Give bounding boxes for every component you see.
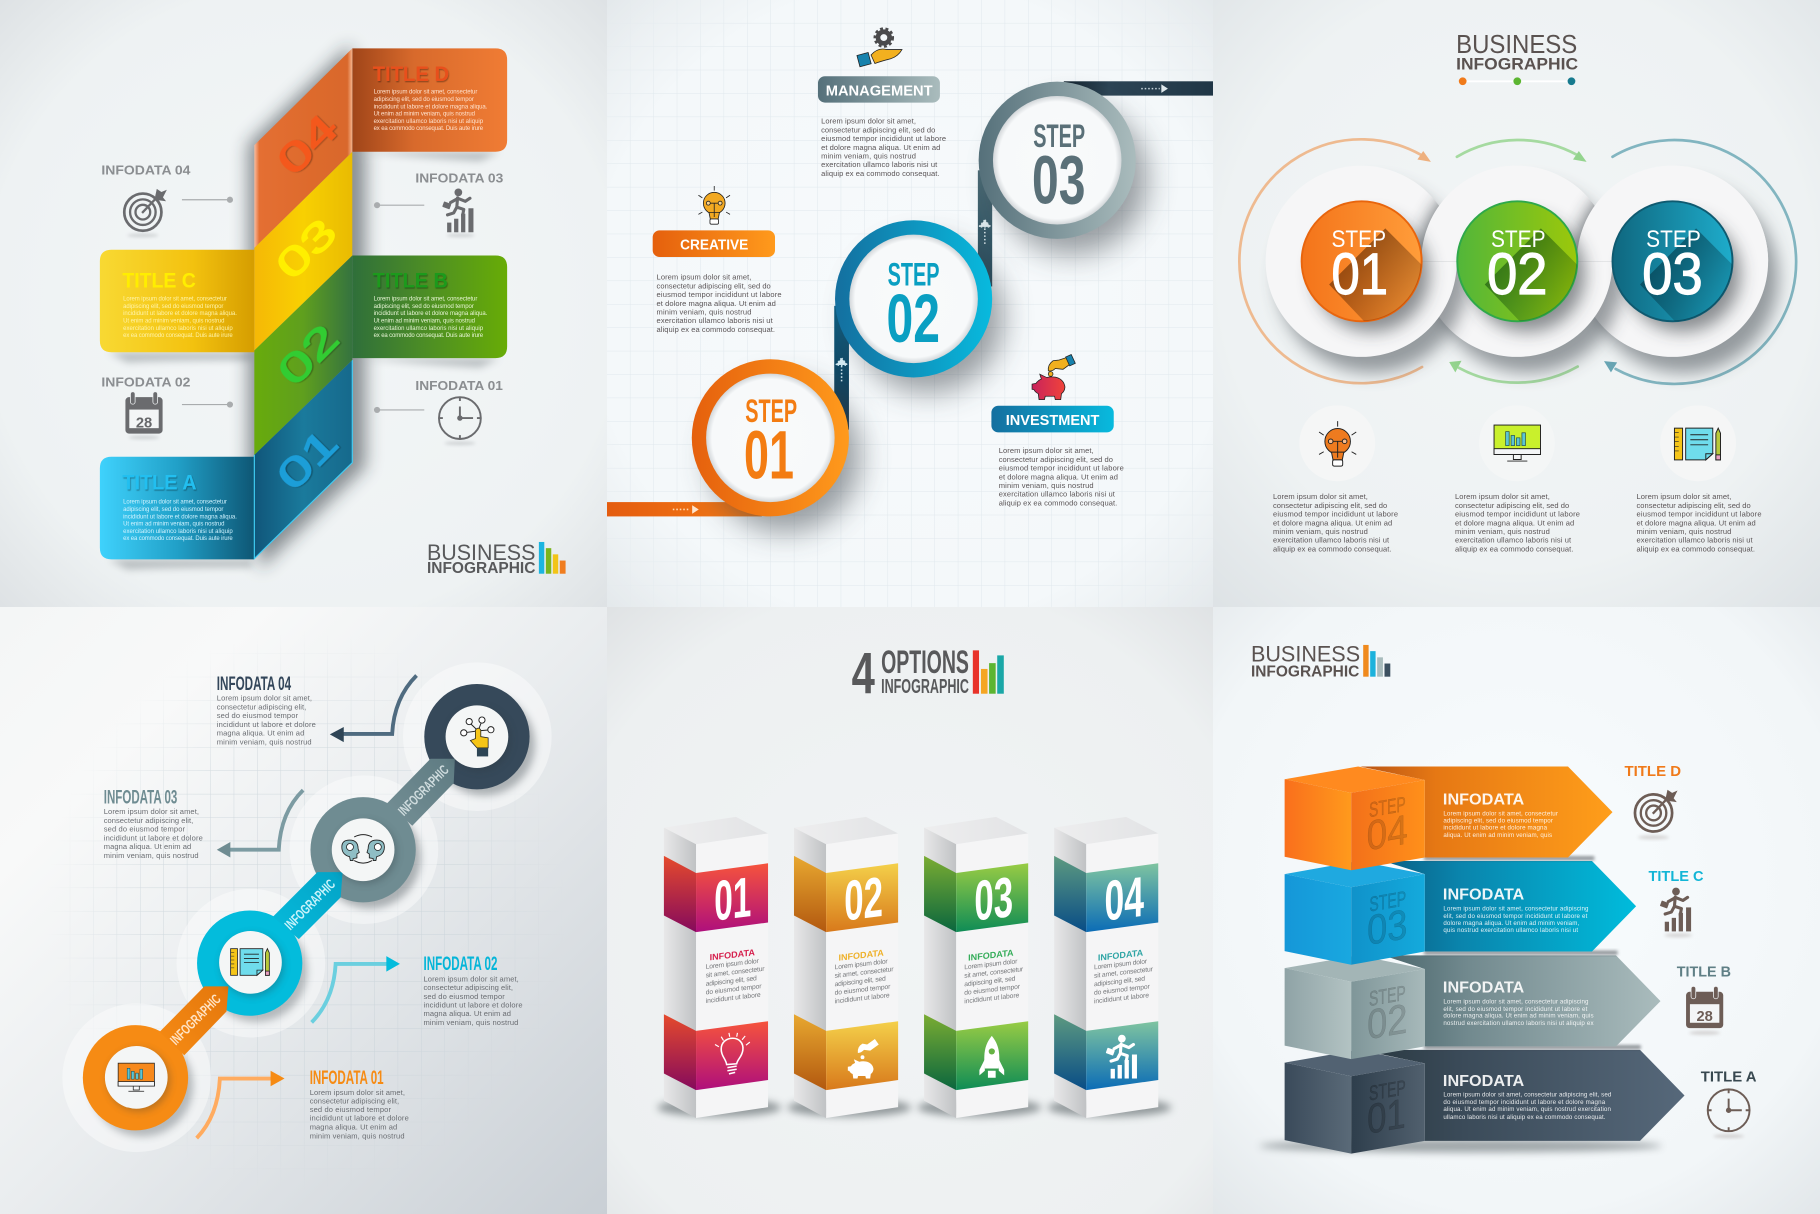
label: investment: INVESTMENT [1006, 413, 1100, 429]
logo: business infographic: INFOGRAPHIC [427, 560, 535, 577]
text block: step 01: eiusmod tempor incididunt ut labore [1273, 509, 1398, 518]
column 02 [787, 817, 911, 1118]
arrow block: step 04: STEP [1369, 793, 1406, 822]
text block: infodata 04: consectetur adipiscing elit, [217, 703, 306, 712]
text block: step 02: aliquip ex ea commodo consequat. [1455, 545, 1573, 554]
arrow block: step 01: 01 [1367, 1089, 1406, 1143]
heading [1456, 31, 1578, 85]
icon: piggy bank [1032, 355, 1075, 400]
infodata labels with icons: INFODATA 04 [101, 163, 191, 178]
label: management [818, 76, 940, 103]
icon: light bulb [698, 186, 730, 224]
ribbon shadow [248, 45, 366, 569]
text block: infodata 01 [310, 1067, 409, 1141]
button: step 02: STEP [1491, 226, 1546, 253]
text block: investment: Lorem ipsum dolor sit amet, [999, 446, 1094, 455]
text block: creative: Lorem ipsum dolor sit amet, [657, 273, 751, 282]
text block: creative [657, 273, 782, 334]
icon: bulb in circle [1299, 405, 1375, 481]
infodata labels with icons: INFODATA 03 [415, 171, 503, 186]
column 03: do eiusmod tempor [964, 983, 1021, 997]
title C with runner icon: TITLE C [1649, 869, 1704, 885]
text block: investment: eiusmod tempor incididunt ut labore [999, 463, 1124, 472]
card: title D: TITLE D [373, 63, 449, 86]
card: title C: exercitation ullamco laboris nisi ut aliquip [123, 326, 233, 332]
white circles [1266, 166, 1778, 373]
card: title D: ex ea commodo consequat. Duis aute irure [374, 126, 484, 132]
infodata labels with icons: 28 [136, 415, 152, 431]
column 01 [657, 817, 781, 1118]
title C with runner icon [1649, 869, 1704, 937]
logo: business infographic [1251, 642, 1390, 680]
arrow block: step 04: incididunt ut labore et dolore magna [1443, 825, 1548, 832]
card: title D: adipiscing elit, sed do eiusmod tempor [374, 97, 474, 103]
text block: investment: minim veniam, quis nostrud [999, 481, 1094, 490]
title B with calendar icon: 28 [1696, 1009, 1713, 1025]
arrow block: step 03: Lorem ipsum dolor sit amet, consectetur adipiscing [1443, 906, 1589, 913]
column 04 [1048, 817, 1171, 1118]
card: title C: incididunt ut labore et dolore magna aliqua. [123, 311, 237, 317]
text block: investment [999, 446, 1124, 508]
label: creative: CREATIVE [680, 238, 748, 254]
icon: monitor [105, 1046, 170, 1111]
node: 02 with stem [197, 872, 343, 1022]
ring: step 02 [835, 220, 1004, 393]
button: step 01: 01 [1331, 242, 1388, 307]
column 04: do eiusmod tempor [1094, 983, 1150, 997]
text block: infodata 02: minim veniam, quis nostrud [424, 1018, 518, 1027]
card: title B: Lorem ipsum dolor sit amet, consectetur [374, 296, 477, 302]
logo: business infographic: BUSINESS [1251, 642, 1360, 667]
arrow block: step 03: dolore magna aliqua. Ut enim ad minim veniam, [1443, 920, 1579, 927]
card: title B: TITLE B [373, 270, 448, 293]
diagonal ribbon bands with numbers [254, 48, 352, 559]
diagonal ribbon bands with numbers: 03 [267, 210, 346, 288]
text block: management: Lorem ipsum dolor sit amet, [821, 116, 916, 125]
arrow block: step 01: do eiusmod tempor incididunt ut labore et dolore magna [1443, 1099, 1606, 1106]
column 01: 01 [714, 866, 751, 934]
arrow block: step 03 [1285, 861, 1636, 965]
column 04: 04 [1104, 866, 1144, 934]
card: title D: Ut enim ad minim veniam, quis nostrud [374, 112, 475, 118]
logo: 4 options infographic [852, 641, 1004, 706]
button: step 02: 02 [1487, 242, 1547, 307]
panel: three step ring path [607, 0, 1214, 607]
column 04: Lorem ipsum dolor [1094, 958, 1148, 971]
arrow block: step 01 [1285, 1050, 1685, 1154]
card: title A: TITLE A [122, 472, 197, 495]
arrow: infodata 04 [330, 676, 417, 742]
connecting track [607, 81, 1214, 516]
text block: management: consectetur adipiscing elit, sed do [821, 125, 935, 134]
text block: step 03: eiusmod tempor incididunt ut labore [1637, 509, 1762, 518]
card: title A: incididunt ut labore et dolore magna aliqua. [123, 514, 237, 520]
icon: monitor in circle [1479, 405, 1555, 481]
title B with calendar icon: TITLE B [1677, 964, 1731, 980]
card: title C [100, 250, 254, 352]
column 03: INFODATA [968, 948, 1014, 963]
column 03 [917, 817, 1041, 1118]
column 03: adipiscing elit, sed [964, 976, 1016, 988]
column 02: adipiscing elit, sed [835, 976, 886, 988]
diagonal ribbon bands with numbers: 01 [269, 421, 347, 499]
ring: step 01: 01 [744, 416, 794, 493]
label: management: MANAGEMENT [826, 84, 933, 100]
column 02: Lorem ipsum dolor [835, 958, 888, 971]
card: title A: exercitation ullamco laboris nisi ut aliquip [123, 529, 233, 535]
text block: step 03 [1637, 492, 1762, 554]
text block: infodata 01: incididunt ut labore et dolore [310, 1114, 409, 1123]
card: title B: ex ea commodo consequat. Duis aute irure [374, 333, 484, 339]
node: 02 with stem: INFOGRAPHIC [281, 876, 338, 933]
text block: creative: consectetur adipiscing elit, sed do [657, 281, 771, 290]
text block: step 01: aliquip ex ea commodo consequat. [1273, 545, 1391, 554]
arrow block: step 02: INFODATA [1443, 980, 1524, 997]
card: title C: ex ea commodo consequat. Duis aute irure [123, 333, 233, 339]
text block: infodata 01: Lorem ipsum dolor sit amet, [310, 1088, 405, 1097]
text block: step 01: et dolore magna aliqua. Ut enim ad [1273, 518, 1392, 527]
text block: infodata 01: INFODATA 01 [310, 1067, 384, 1089]
text block: step 01: exercitation ullamco laboris nisi ut [1273, 536, 1390, 545]
arrow block: step 03: quis nostrud exercitation ullamco laboris nisi ut [1443, 927, 1578, 934]
text block: step 01: consectetur adipiscing elit, sed do [1273, 501, 1387, 510]
ground shadow [1259, 1139, 1662, 1152]
text block: infodata 04: INFODATA 04 [217, 673, 291, 695]
text block: step 03: aliquip ex ea commodo consequat. [1637, 545, 1755, 554]
text block: investment: et dolore magna aliqua. Ut enim ad [999, 472, 1118, 481]
column 04: incididunt ut labore [1094, 992, 1149, 1005]
ring: step 01 [692, 359, 861, 532]
card: title B: incididunt ut labore et dolore magna aliqua. [374, 311, 488, 317]
arrow block: step 03: 03 [1367, 900, 1407, 954]
text block: step 02: eiusmod tempor incididunt ut labore [1455, 509, 1580, 518]
text block: infodata 02: INFODATA 02 [424, 953, 497, 975]
text block: management: et dolore magna aliqua. Ut enim ad [821, 143, 940, 152]
text block: step 02 [1455, 492, 1580, 554]
arrow block: step 02: elit, sed do eiusmod tempor incididunt ut labore et [1443, 1006, 1588, 1013]
text block: creative: exercitation ullamco laboris nisi ut [657, 316, 774, 325]
column 01: INFODATA [710, 947, 755, 962]
arrow block: step 04: aliqua. Ut enim ad minim veniam, quis [1443, 832, 1552, 839]
text block: infodata 03: consectetur adipiscing elit, [104, 816, 193, 825]
text block: management: minim veniam, quis nostrud [821, 151, 916, 160]
text block: infodata 04: sed do eiusmod tempor [217, 711, 299, 720]
text block: creative: aliquip ex ea commodo consequat. [657, 325, 775, 334]
arrow block: step 04: 04 [1367, 806, 1408, 859]
text block: step 01: minim veniam, quis nostrud [1273, 527, 1368, 536]
card: title B: adipiscing elit, sed do eiusmod tempor [374, 304, 474, 310]
arrow block: step 03: elit, sed do eiusmod tempor incididunt ut labore et [1443, 913, 1588, 920]
column 02: 02 [844, 866, 883, 934]
icon: exchange heads [332, 818, 397, 884]
column 02: sit amet, consectetur [835, 966, 894, 980]
title D with target icon: TITLE D [1625, 764, 1681, 780]
text block: management: exercitation ullamco laboris nisi ut [821, 160, 938, 169]
label: investment [991, 406, 1114, 432]
title D with target icon [1625, 764, 1681, 839]
button: step 01: STEP [1331, 226, 1386, 253]
card: title D: exercitation ullamco laboris nisi ut aliquip [374, 119, 484, 125]
button: step 03: STEP [1646, 226, 1701, 253]
logo: 4 options infographic: INFOGRAPHIC [881, 676, 969, 698]
arrow: infodata 03 [217, 790, 303, 857]
arrow block: step 03: INFODATA [1443, 887, 1524, 904]
arrow block: step 04 [1285, 766, 1613, 870]
column 03: 03 [974, 866, 1013, 934]
infodata labels with icons: INFODATA 01 [415, 378, 503, 393]
text block: infodata 02: sed do eiusmod tempor [424, 992, 505, 1001]
card: title D [352, 48, 507, 152]
text block: step 01 [1273, 492, 1398, 554]
icon: notes [219, 931, 284, 996]
arrow: infodata 01 [197, 1071, 285, 1138]
panel: four option columns [607, 607, 1214, 1214]
column 02: incididunt ut labore [835, 992, 890, 1005]
text block: investment: exercitation ullamco laboris nisi ut [999, 490, 1116, 499]
card: title A: ex ea commodo consequat. Duis aute irure [123, 536, 233, 542]
logo: business infographic: BUSINESS [427, 540, 535, 565]
card: title D: Lorem ipsum dolor sit amet, consectetur [374, 90, 477, 96]
ring: step 03: 03 [1032, 142, 1085, 219]
column 01: incididunt ut labore [706, 992, 761, 1005]
node: 03 with stem: INFOGRAPHIC [395, 762, 452, 819]
card: title C: Ut enim ad minim veniam, quis nostrud [123, 318, 225, 324]
text block: infodata 02: consectetur adipiscing elit, [424, 983, 513, 992]
heading: BUSINESS [1456, 31, 1577, 59]
text block: step 02: exercitation ullamco laboris nisi ut [1455, 536, 1572, 545]
text block: infodata 02 [424, 953, 523, 1027]
column 01: adipiscing elit, sed [706, 975, 757, 988]
ring: step 02: 02 [887, 280, 940, 357]
text block: infodata 03: Lorem ipsum dolor sit amet, [104, 807, 199, 816]
text block: creative: et dolore magna aliqua. Ut enim ad [657, 299, 776, 308]
text block: step 03: Lorem ipsum dolor sit amet, [1637, 492, 1731, 501]
ring: step 02: STEP [888, 256, 940, 292]
column 02: do eiusmod tempor [835, 983, 891, 997]
column 01: Lorem ipsum dolor [706, 958, 759, 971]
arrow block: step 02: 02 [1367, 995, 1407, 1048]
text block: infodata 04: magna aliqua. Ut enim ad [217, 729, 304, 738]
card: title B: Ut enim ad minim veniam, quis nostrud [374, 318, 475, 324]
text block: step 02: et dolore magna aliqua. Ut enim ad [1455, 518, 1574, 527]
text block: infodata 03: magna aliqua. Ut enim ad [104, 842, 191, 851]
arrow block: step 04: Lorem ipsum dolor sit amet, consectetur [1443, 810, 1558, 817]
text block: infodata 03: minim veniam, quis nostrud [104, 851, 199, 860]
panel: diagonal timeline [0, 607, 607, 1214]
text block: step 03: exercitation ullamco laboris nisi ut [1637, 536, 1754, 545]
text block: step 03: consectetur adipiscing elit, sed do [1637, 501, 1751, 510]
icon: touch network [446, 705, 511, 771]
arrow block: step 02: nostrud exercitation ullamco laboris nisi ut aliquip ex [1443, 1020, 1594, 1027]
button: step 03 [1613, 201, 1741, 332]
text block: step 02: minim veniam, quis nostrud [1455, 527, 1550, 536]
column 02: INFODATA [838, 948, 884, 963]
text block: management: aliquip ex ea commodo consequat. [821, 169, 940, 178]
column 03: incididunt ut labore [964, 992, 1020, 1005]
card: title C: adipiscing elit, sed do eiusmod tempor [123, 304, 223, 310]
card: title A: Lorem ipsum dolor sit amet, consectetur [123, 500, 227, 506]
text block: infodata 02: Lorem ipsum dolor sit amet, [424, 974, 519, 983]
arrow block: step 01: STEP [1369, 1076, 1406, 1106]
label: creative [653, 230, 775, 257]
text block: step 01: Lorem ipsum dolor sit amet, [1273, 492, 1368, 501]
node: 04 [424, 684, 535, 796]
card: title A: Ut enim ad minim veniam, quis nostrud [123, 522, 225, 528]
icon: gear and hand [857, 29, 902, 67]
arrow block: step 01: aliqua. Ut enim ad minim veniam, quis nostrud exercitation [1443, 1106, 1612, 1113]
button: step 03: 03 [1642, 242, 1703, 307]
text block: step 02: Lorem ipsum dolor sit amet, [1455, 492, 1550, 501]
card: title D: incididunt ut labore et dolore magna aliqua. [374, 104, 488, 110]
text block: infodata 04 [217, 673, 316, 746]
panel: three linked circles [1213, 0, 1820, 607]
card: title A: adipiscing elit, sed do eiusmod tempor [123, 507, 223, 513]
column 04: sit amet, consectetur [1094, 966, 1154, 980]
panel: stepped arrow blocks [1213, 607, 1820, 1214]
text block: infodata 02: magna aliqua. Ut enim ad [424, 1009, 511, 1018]
card: title A [100, 457, 254, 559]
text block: management: eiusmod tempor incididunt ut labore [821, 134, 946, 143]
diagonal ribbon bands with numbers: 04 [269, 106, 347, 184]
button: step 01 [1302, 201, 1430, 332]
arrow block: step 02: Lorem ipsum dolor sit amet, consectetur adipiscing [1443, 998, 1589, 1005]
text block: infodata 01: sed do eiusmod tempor [310, 1105, 391, 1114]
arrow block: step 01: INFODATA [1443, 1073, 1524, 1090]
text block: infodata 01: consectetur adipiscing elit, [310, 1097, 399, 1106]
text block: infodata 03: incididunt ut labore et dolore [104, 833, 203, 842]
card: title B [352, 255, 507, 358]
column 01: do eiusmod tempor [706, 983, 762, 997]
text block: infodata 02: incididunt ut labore et dolore [424, 1000, 523, 1009]
logo: business infographic: INFOGRAPHIC [1251, 663, 1359, 680]
circular arrows [1239, 139, 1796, 384]
card: title B: exercitation ullamco laboris nisi ut aliquip [374, 326, 484, 332]
text block: investment: aliquip ex ea commodo consequat. [999, 499, 1117, 508]
arrow block: step 03: STEP [1369, 887, 1406, 917]
card shadows [108, 152, 499, 569]
arrow block: step 01: Lorem ipsum dolor sit amet, consectetur adipiscing elit, sed [1443, 1092, 1612, 1099]
column 04: adipiscing elit, sed [1094, 976, 1145, 988]
text block: infodata 04: incididunt ut labore et dolore [217, 720, 316, 729]
infodata labels with icons: INFODATA 02 [101, 375, 190, 390]
logo: 4 options infographic: 4 [852, 641, 875, 706]
button: step 02 [1457, 201, 1585, 332]
arrow: infodata 02 [312, 956, 400, 1022]
arrow block: step 02: STEP [1369, 982, 1406, 1011]
text block: infodata 03: INFODATA 03 [104, 786, 177, 808]
infodata labels with icons [101, 163, 503, 445]
logo: 4 options infographic: OPTIONS [881, 644, 969, 680]
column 04: INFODATA [1098, 948, 1144, 963]
title A with clock icon: TITLE A [1701, 1070, 1757, 1086]
text block: creative: eiusmod tempor incididunt ut labore [657, 290, 782, 299]
ring: step 03 [979, 82, 1147, 255]
text block: creative: minim veniam, quis nostrud [657, 307, 751, 316]
text block: management [821, 116, 946, 178]
text block: step 03: et dolore magna aliqua. Ut enim ad [1637, 518, 1756, 527]
heading: INFOGRAPHIC [1456, 55, 1578, 74]
text block: step 02: consectetur adipiscing elit, sed do [1455, 501, 1569, 510]
arrow block: step 02 [1285, 955, 1661, 1059]
ring: step 03: STEP [1033, 118, 1085, 154]
text block: infodata 04: minim veniam, quis nostrud [217, 737, 312, 746]
panel: folded ribbon infographic [0, 0, 607, 607]
text block: infodata 04: Lorem ipsum dolor sit amet, [217, 694, 312, 703]
diagonal ribbon bands with numbers: 02 [269, 316, 348, 394]
arrow block: step 02: dolore magna aliqua. Ut enim ad minim veniam, quis [1443, 1013, 1594, 1020]
card: title C: Lorem ipsum dolor sit amet, consectetur [123, 296, 227, 302]
halos [62, 662, 552, 1152]
text block: infodata 01: minim veniam, quis nostrud [310, 1132, 405, 1141]
column 03: Lorem ipsum dolor [964, 958, 1018, 971]
arrow block: step 01: ullamco laboris nisi ut aliquip ex ea commodo consequat. [1443, 1114, 1606, 1121]
text block: investment: consectetur adipiscing elit, sed do [999, 455, 1113, 464]
node: 01 with stem [83, 986, 228, 1137]
card: title C: TITLE C [122, 270, 196, 293]
node: 01 with stem: INFOGRAPHIC [167, 991, 224, 1048]
text block: infodata 03 [104, 786, 203, 860]
column 03: sit amet, consectetur [964, 966, 1024, 980]
text block: infodata 01: magna aliqua. Ut enim ad [310, 1123, 397, 1132]
icon: notes in circle [1660, 405, 1736, 481]
title B with calendar icon [1677, 964, 1731, 1035]
title A with clock icon [1701, 1070, 1757, 1138]
logo: business infographic [427, 540, 566, 577]
text block: infodata 03: sed do eiusmod tempor [104, 825, 186, 834]
text block: step 03: minim veniam, quis nostrud [1637, 527, 1731, 536]
column 01: sit amet, consectetur [706, 966, 765, 979]
ring: step 01: STEP [745, 393, 797, 429]
node: 03 with stem [310, 759, 455, 909]
arrow block: step 04: INFODATA [1443, 791, 1524, 808]
arrow block: step 04: adipiscing elit, sed do eiusmod tempor [1443, 818, 1553, 825]
